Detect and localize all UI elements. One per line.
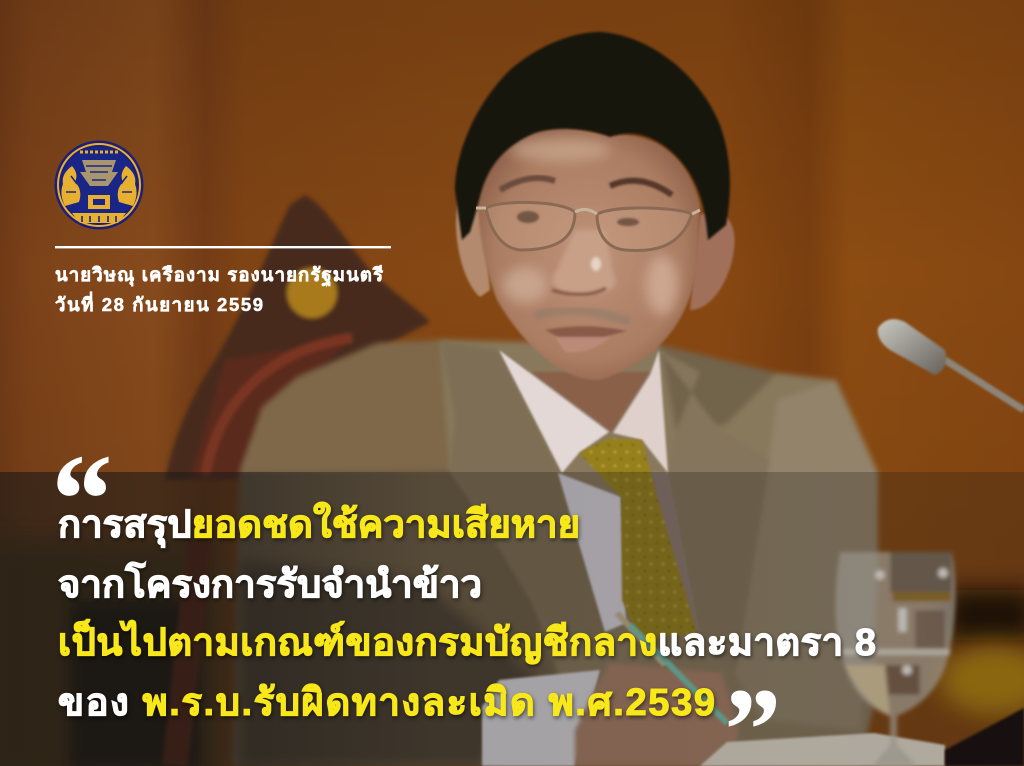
writing hand [575,663,739,766]
eyes [517,211,639,226]
left ear [456,195,490,297]
right lapel [659,350,769,673]
lips [545,326,627,352]
quote line 4: ของ พ.ร.บ.รับผิดทางละเมิด พ.ศ.2539 [58,682,715,724]
face [478,128,700,380]
dark object lower right [945,708,1024,766]
dark quote band [0,472,1024,766]
date: วันที่ 28 กันยายน 2559 [55,291,263,315]
shirt and collar [499,350,700,633]
carved wooden chair [165,195,430,766]
suit jacket [232,340,878,766]
pen [617,613,727,723]
glasses [476,202,700,251]
white divider line [55,246,391,248]
quote line 1: การสรุปยอดชดใช้ความเสียหาย [58,502,580,548]
necktie [579,438,697,640]
shirt cuff [482,670,600,766]
paper on table [700,733,945,766]
hair [455,32,730,240]
opening quotation mark: “ [45,428,110,572]
government seal logo [54,140,144,230]
left lapel [440,340,610,660]
water glass [835,552,956,766]
quote line 2: จากโครงการรับจำนำข้าว [58,561,482,606]
microphone [878,319,1024,410]
right ear [690,212,735,310]
quote line 3: เป็นไปตามเกณฑ์ของกรมบัญชีกลางและมาตรา 8 [58,619,876,664]
eyebrows [500,178,672,195]
speaker name: นายวิษณุ เครืองาม รองนายกรัฐมนตรี [55,264,383,287]
